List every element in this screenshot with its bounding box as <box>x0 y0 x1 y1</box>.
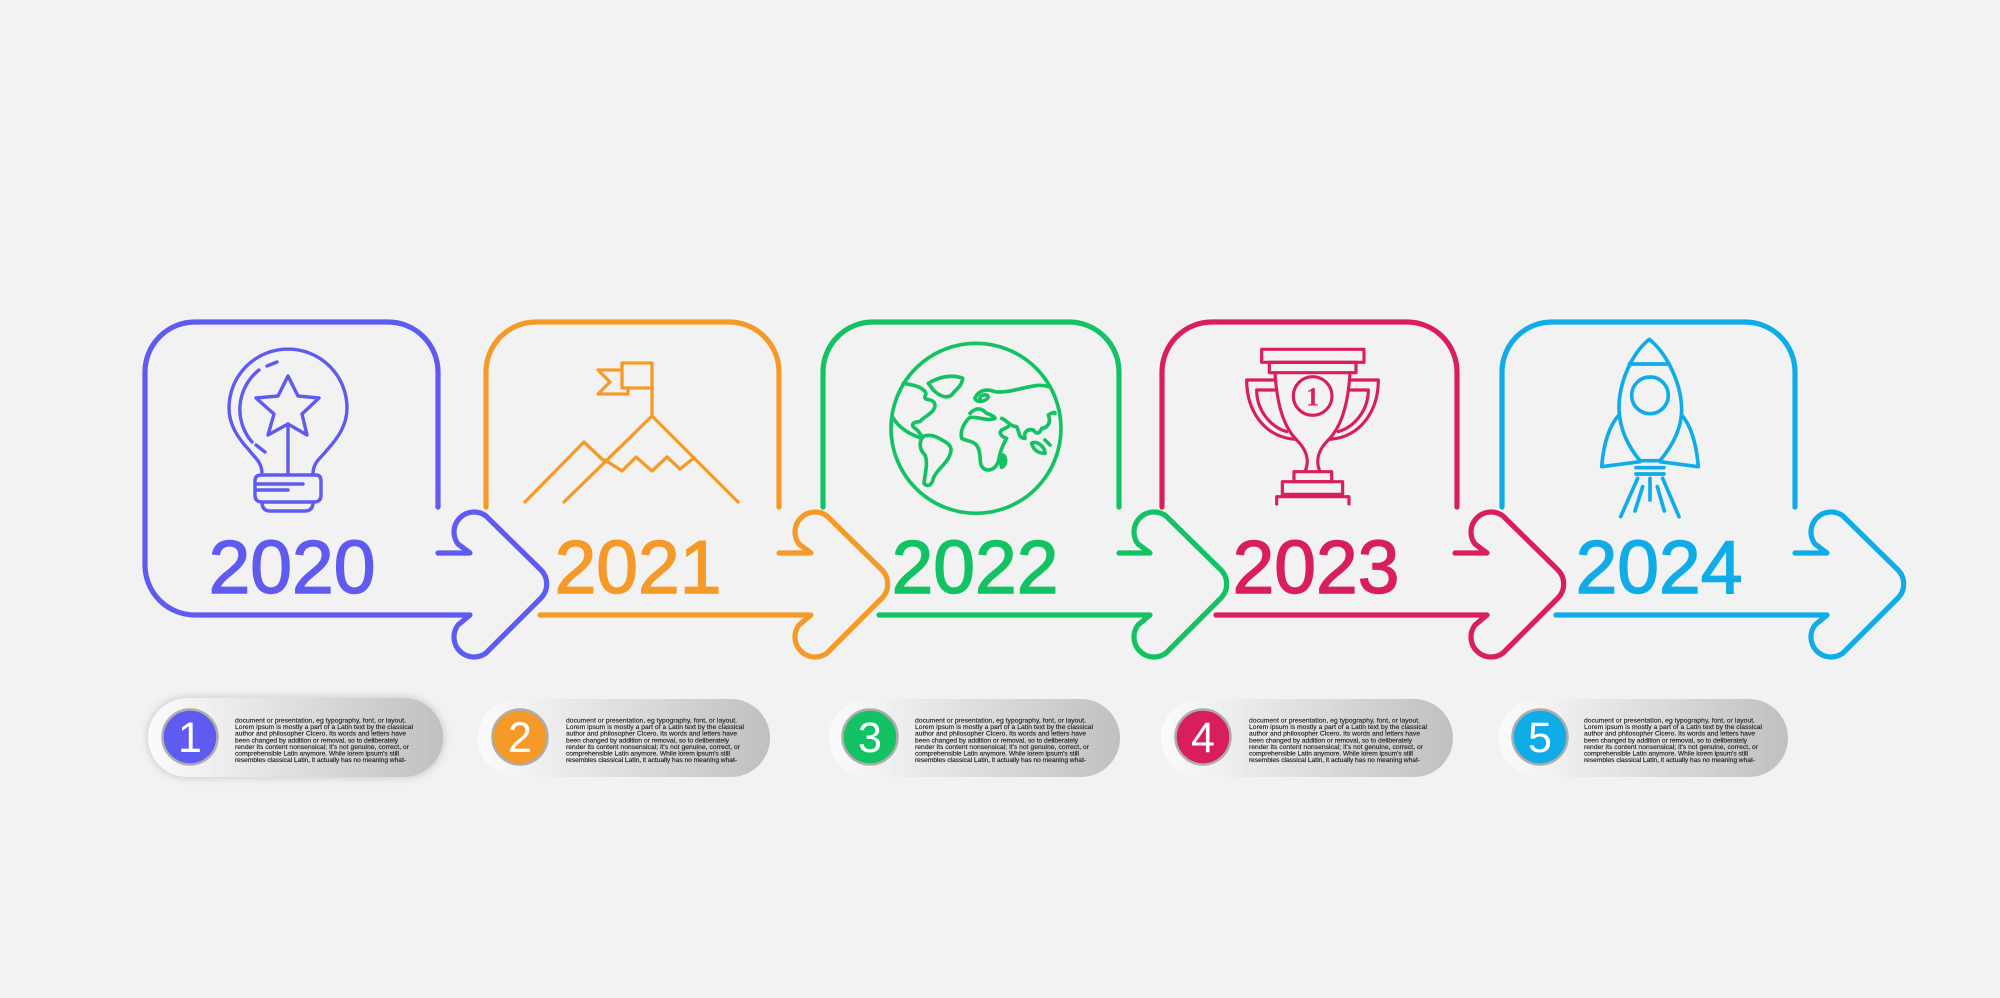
description 1: document or presentation, eg typography, font, or layout. <box>235 718 406 724</box>
description 4: author and philosopher Cicero. Its words and letters have <box>1249 731 1420 738</box>
number badge 2: 2 <box>508 714 532 762</box>
description 1: resembles classical Latin, it actually has no meaning what- <box>235 757 406 764</box>
description 1: been changed by addition or removal, so to deliberately <box>235 737 399 744</box>
icon: light bulb with star <box>229 349 347 511</box>
description 5: been changed by addition or removal, so to deliberately <box>1584 737 1748 744</box>
description 1: author and philosopher Cicero. Its words and letters have <box>235 731 406 738</box>
icon: globe <box>891 343 1061 513</box>
description 5: author and philosopher Cicero. Its words and letters have <box>1584 731 1755 738</box>
description 3: been changed by addition or removal, so to deliberately <box>915 737 1079 744</box>
description 5: comprehensible Latin anymore. While lorem ipsum's still <box>1584 750 1748 758</box>
description 3: document or presentation, eg typography, font, or layout. <box>915 718 1086 724</box>
description 1: Lorem ipsum is mostly a part of a Latin text by the classical <box>235 724 414 731</box>
description 2: render its content nonsensical; it's not genuine, correct, or <box>566 744 741 751</box>
description 4: document or presentation, eg typography, font, or layout. <box>1249 718 1420 724</box>
description 1: comprehensible Latin anymore. While lorem ipsum's still <box>235 750 400 758</box>
panel: 2022 <box>823 322 1227 657</box>
pill 4 <box>1161 699 1453 777</box>
panel: 2021 <box>486 322 888 657</box>
icon: trophy <box>1247 349 1378 504</box>
arrow frame 2022 <box>823 322 1227 657</box>
description 2: author and philosopher Cicero. Its words and letters have <box>566 731 737 738</box>
arrow frame 2023 <box>1162 322 1564 657</box>
arrow frame 2021 <box>486 322 888 657</box>
icon: mountain with flag <box>525 363 738 502</box>
number badge 2 <box>492 710 548 764</box>
description 4: resembles classical Latin, it actually has no meaning what- <box>1249 757 1420 764</box>
panel: 2020 <box>145 322 547 657</box>
year 2024: 2024 <box>1576 525 1742 609</box>
description 4: comprehensible Latin anymore. While lorem ipsum's still <box>1249 750 1414 758</box>
description 2: Lorem ipsum is mostly a part of a Latin text by the classical <box>566 724 744 731</box>
description 3: resembles classical Latin, it actually has no meaning what- <box>915 757 1086 764</box>
number badge 5 <box>1512 710 1568 764</box>
description 2: comprehensible Latin anymore. While lorem ipsum's still <box>566 750 730 758</box>
description 5: render its content nonsensical; it's not genuine, correct, or <box>1584 744 1759 751</box>
description 4: been changed by addition or removal, so to deliberately <box>1249 737 1413 744</box>
description 3: Lorem ipsum is mostly a part of a Latin text by the classical <box>915 724 1094 731</box>
description 5: Lorem ipsum is mostly a part of a Latin text by the classical <box>1584 724 1762 731</box>
arrow frame 2020 <box>145 322 547 657</box>
year 2023: 2023 <box>1233 525 1399 609</box>
description 4: Lorem ipsum is mostly a part of a Latin text by the classical <box>1249 724 1428 731</box>
description 2: document or presentation, eg typography, font, or layout. <box>566 718 737 724</box>
description 2: resembles classical Latin, it actually has no meaning what- <box>566 757 737 764</box>
number badge 3 <box>842 710 898 764</box>
description 1: render its content nonsensical; it's not genuine, correct, or <box>235 744 410 751</box>
pill 5 <box>1499 699 1788 777</box>
description 2: been changed by addition or removal, so to deliberately <box>566 737 730 744</box>
description 3: author and philosopher Cicero. Its words and letters have <box>915 731 1086 738</box>
pill 3 <box>829 699 1120 777</box>
description 5: resembles classical Latin, it actually has no meaning what- <box>1584 757 1755 764</box>
number badge 1 <box>162 710 218 764</box>
description 5: document or presentation, eg typography, font, or layout. <box>1584 718 1755 724</box>
year 2021: 2021 <box>555 525 721 609</box>
description 3: render its content nonsensical; it's not genuine, correct, or <box>915 744 1090 751</box>
icon: rocket <box>1602 339 1698 517</box>
number badge 3: 3 <box>858 714 882 762</box>
trophy rank number: 1 <box>1306 382 1319 411</box>
panel: 2023 <box>1162 322 1564 657</box>
description 3: comprehensible Latin anymore. While lorem ipsum's still <box>915 750 1080 758</box>
number badge 4: 4 <box>1191 714 1215 762</box>
panel: 2024 <box>1502 322 1904 657</box>
number badge 4 <box>1176 710 1230 764</box>
arrow frame 2024 <box>1502 322 1904 657</box>
pill 2 <box>478 699 770 777</box>
number badge 1: 1 <box>178 714 202 762</box>
description 4: render its content nonsensical; it's not genuine, correct, or <box>1249 744 1424 751</box>
year 2020: 2020 <box>209 525 375 609</box>
pill 1 <box>146 696 445 779</box>
number badge 5: 5 <box>1528 714 1552 762</box>
year 2022: 2022 <box>892 525 1058 609</box>
